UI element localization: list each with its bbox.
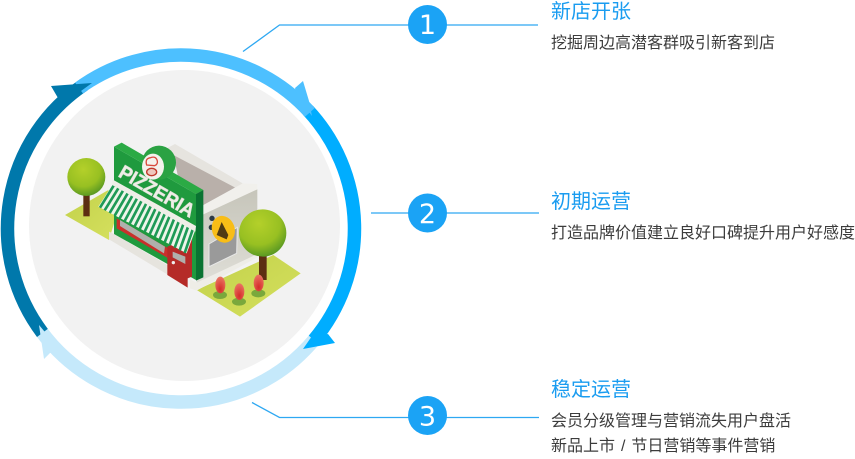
- connector line 3: [252, 402, 539, 418]
- roof and side wall: [167, 144, 257, 291]
- hanging sign: [208, 213, 239, 246]
- arrowhead: light: [295, 81, 312, 116]
- sign text: PIZZERIA: [115, 162, 198, 222]
- heading 2: 初期运营: [551, 191, 631, 213]
- lawn left: [65, 190, 115, 240]
- cycle ring: [8, 55, 354, 402]
- ring segment: bright right: [308, 110, 354, 340]
- description 3 line 2: 新品上市 / 节日营销等事件营销: [551, 438, 775, 455]
- arrowhead: pale: [39, 325, 60, 359]
- green sign front: [114, 147, 196, 280]
- description 3: 会员分级管理与营销流失用户盘活: [551, 413, 791, 430]
- window frame: [117, 218, 168, 258]
- number badge 1: 1: [419, 10, 436, 41]
- base front: [109, 232, 168, 275]
- description 2: 打造品牌价值建立良好口碑提升用户好感度: [551, 225, 855, 242]
- illustration: pizzeria store: [65, 143, 301, 317]
- sign round: [142, 146, 176, 180]
- number badge 2: 2: [419, 199, 436, 230]
- arrowhead: dark: [51, 83, 92, 99]
- number badge 3: [408, 396, 447, 435]
- heading 3: 稳定运营: [551, 379, 631, 401]
- awning: [98, 179, 196, 253]
- door: [167, 237, 192, 288]
- inner grey disc: [29, 70, 340, 381]
- connector line 2: [371, 212, 539, 214]
- tree left: [67, 158, 105, 216]
- green sign side: [114, 143, 203, 194]
- tulips: [213, 275, 265, 306]
- lawn right: [197, 255, 301, 317]
- number badge 1: [408, 5, 447, 44]
- sign logo: [142, 154, 164, 180]
- side window: [209, 227, 237, 267]
- description 1: 挖掘周边高潜客群吸引新客到店: [551, 35, 775, 52]
- number badge 3: 3: [419, 402, 436, 432]
- ring segment: light top: [79, 55, 310, 112]
- ring segment: pale bottom: [41, 330, 314, 402]
- number badge 2: [408, 194, 447, 232]
- arrowhead: bright: [303, 334, 335, 349]
- heading 1: 新店开张: [551, 1, 631, 23]
- ring segment: dark left: [8, 85, 84, 333]
- tree right: [239, 209, 286, 280]
- connector line 1: [243, 25, 538, 52]
